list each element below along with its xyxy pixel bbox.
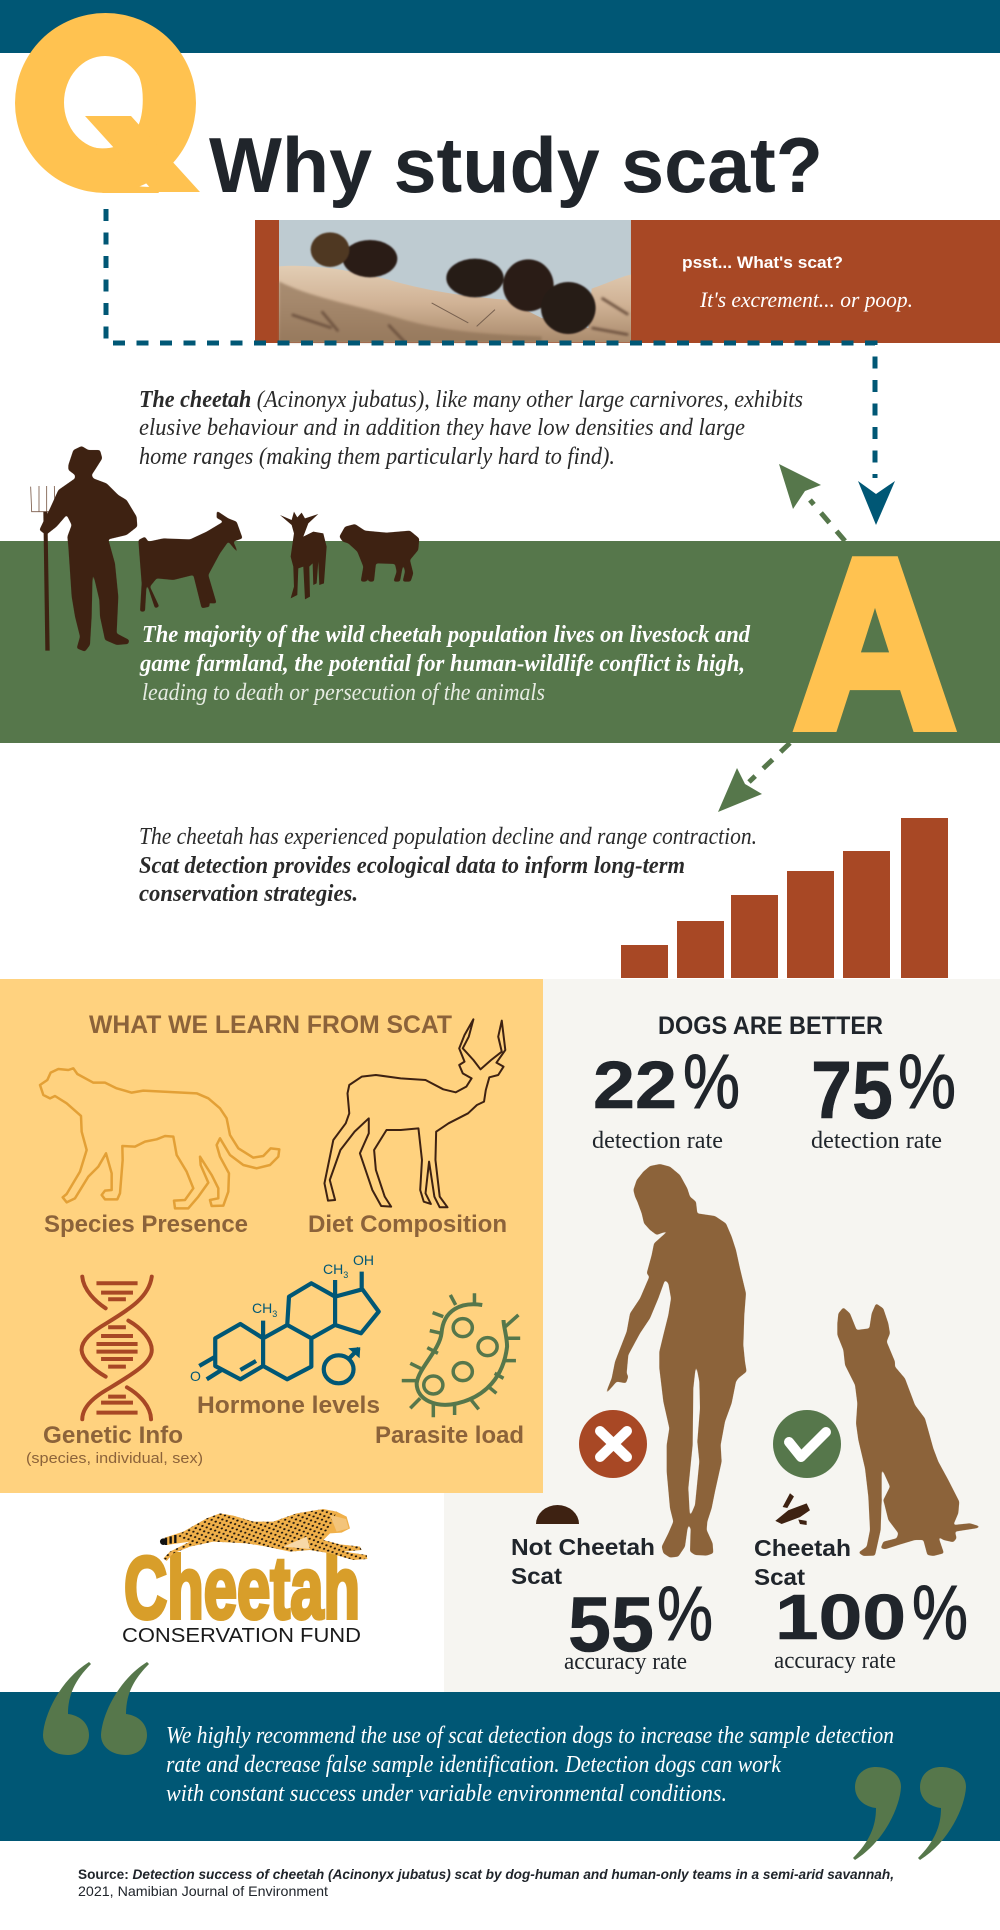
stat: 100% dog accuracy: 100 <box>775 1581 906 1653</box>
label: species presence: Species Presence <box>44 1211 248 1238</box>
label: genetic info: Genetic Info <box>43 1422 183 1449</box>
icon: cheetah scat <box>775 1493 810 1525</box>
icon: not cheetah scat <box>536 1505 579 1524</box>
logo subtitle: CONSERVATION FUND <box>122 1625 361 1647</box>
stat: 75% dog detection <box>811 1039 956 1154</box>
stat: 55% human accuracy: 55 <box>568 1580 654 1668</box>
icon: gazelle outline <box>324 1019 505 1207</box>
label: cheetah scat: Cheetah <box>754 1535 851 1561</box>
stat: 22% human detection: 22 <box>593 1048 677 1123</box>
logo mark: running cheetah <box>160 1509 367 1561</box>
icon: opening quotation mark <box>43 1662 149 1755</box>
source citation: 2021, Namibian Journal of Environment <box>78 1883 328 1899</box>
stat: 55% human accuracy <box>564 1571 713 1675</box>
text block: population decline <box>139 824 757 907</box>
text block: human-wildlife conflict <box>139 622 751 706</box>
heading: dogs are better: DOGS ARE BETTER <box>658 1012 883 1040</box>
logo: Cheetah Conservation Fund <box>122 1509 367 1647</box>
source citation: Source: Detection success of cheetah (Acinonyx jubatus) scat by dog-human and human-only teams in a semi-arid savannah, <box>78 1866 894 1882</box>
panel: green farmland band <box>0 541 1000 743</box>
arrow: green arrow to lower text <box>718 743 790 812</box>
icon: goat <box>138 511 243 612</box>
heading: what we learn: WHAT WE LEARN FROM SCAT <box>89 1011 452 1039</box>
label: genetic info detail: (species, individual, sex) <box>26 1450 203 1467</box>
panel: dogs are better <box>444 979 1000 1693</box>
icon: steroid hormone molecule: 3 <box>272 1309 277 1319</box>
stat: 75% dog detection: 75 <box>811 1045 893 1136</box>
text block: human-wildlife conflict: game farmland, the potential for human-wildlife conflict is high, <box>139 651 745 677</box>
letter A: A <box>795 512 955 777</box>
bar chart <box>621 818 948 978</box>
text block: population decline: The cheetah has experienced population decline and range contraction. <box>139 824 757 850</box>
text block: human-wildlife conflict: leading to death or persecution of the animals <box>142 680 545 706</box>
text block: cheetah behaviour: The cheetah (Acinonyx jubatus), like many other large carnivores, exhibits <box>139 387 803 413</box>
arrow: green arrow to upper text <box>779 464 845 541</box>
text block: quote: We highly recommend the use of scat detection dogs to increase the sample detection <box>166 1723 894 1749</box>
icon: steroid hormone molecule: CH <box>323 1261 343 1277</box>
stat: 75% dog detection: detection rate <box>811 1128 942 1154</box>
source citation <box>78 1866 894 1899</box>
icon: young goat <box>280 512 327 599</box>
icon: DNA helix <box>82 1277 152 1419</box>
label: not cheetah scat: Scat <box>511 1563 562 1589</box>
stat: 100% dog accuracy: accuracy rate <box>774 1648 896 1674</box>
label: cheetah scat: Scat <box>754 1564 805 1590</box>
stat: 75% dog detection: % <box>898 1039 956 1125</box>
label: cheetah scat <box>754 1535 851 1590</box>
panel: what we learn from scat <box>0 979 543 1493</box>
panel: what is scat strip <box>255 220 1000 343</box>
text block: quote <box>166 1723 894 1807</box>
label: not cheetah scat: Not Cheetah <box>511 1534 655 1560</box>
icon: parasite <box>402 1293 520 1417</box>
icon: closing quotation mark <box>853 1767 966 1860</box>
icon: woman pointing <box>605 1164 747 1558</box>
icon: steroid hormone molecule: O <box>190 1368 201 1384</box>
stat: 22% human detection <box>592 1039 740 1154</box>
panel: recommendation quote band <box>0 1692 1000 1841</box>
label: not cheetah scat <box>511 1534 655 1589</box>
text block: human-wildlife conflict: The majority of the wild cheetah population lives on livestock and <box>142 622 751 648</box>
icon: farmer with pitchfork <box>31 446 137 652</box>
text block: quote: with constant success under variable environmental conditions. <box>166 1781 727 1807</box>
stat: 55% human accuracy: accuracy rate <box>564 1649 687 1675</box>
text block: population decline: Scat detection provides ecological data to inform long-term <box>139 853 685 879</box>
text block: cheetah behaviour: elusive behaviour and in addition they have low densities and large <box>139 415 745 441</box>
text block: population decline: conservation strategies. <box>139 881 358 907</box>
arrow: dashed connector from Q to A <box>106 209 895 525</box>
text block: cheetah behaviour: home ranges (making them particularly hard to find). <box>139 444 615 470</box>
icon: sitting dog <box>837 1303 981 1556</box>
top banner <box>0 0 1000 53</box>
label: parasite load: Parasite load <box>375 1422 524 1449</box>
label: diet composition: Diet Composition <box>308 1211 507 1238</box>
stat: 100% dog accuracy <box>774 1570 968 1674</box>
icon: cheetah outline <box>40 1068 279 1208</box>
stat: 55% human accuracy: % <box>657 1571 713 1657</box>
stat: 22% human detection: % <box>683 1039 740 1125</box>
icon: cross badge <box>579 1410 647 1478</box>
callout: psst heading: psst... What's scat? <box>682 253 843 272</box>
icon: sheep <box>339 524 419 582</box>
icon: steroid hormone molecule: 3 <box>343 1270 348 1280</box>
stat: 100% dog accuracy: % <box>912 1570 968 1656</box>
icon: steroid hormone molecule: OH <box>353 1252 374 1268</box>
text block: cheetah behaviour <box>139 387 803 470</box>
icon: steroid hormone molecule: CH <box>252 1300 272 1316</box>
stat: 22% human detection: detection rate <box>592 1128 723 1154</box>
title: Why study scat? <box>209 121 823 209</box>
callout: definition: It's excrement... or poop. <box>699 287 913 312</box>
label: hormone levels: Hormone levels <box>197 1392 380 1419</box>
logo: Cheetah Conservation Fund: Cheetah <box>124 1538 360 1637</box>
icon: steroid hormone molecule <box>190 1252 379 1384</box>
text block: quote: rate and decrease false sample identification. Detection dogs can work <box>166 1752 781 1778</box>
icon: check badge <box>773 1410 841 1478</box>
photo: scat on rock <box>279 220 631 342</box>
